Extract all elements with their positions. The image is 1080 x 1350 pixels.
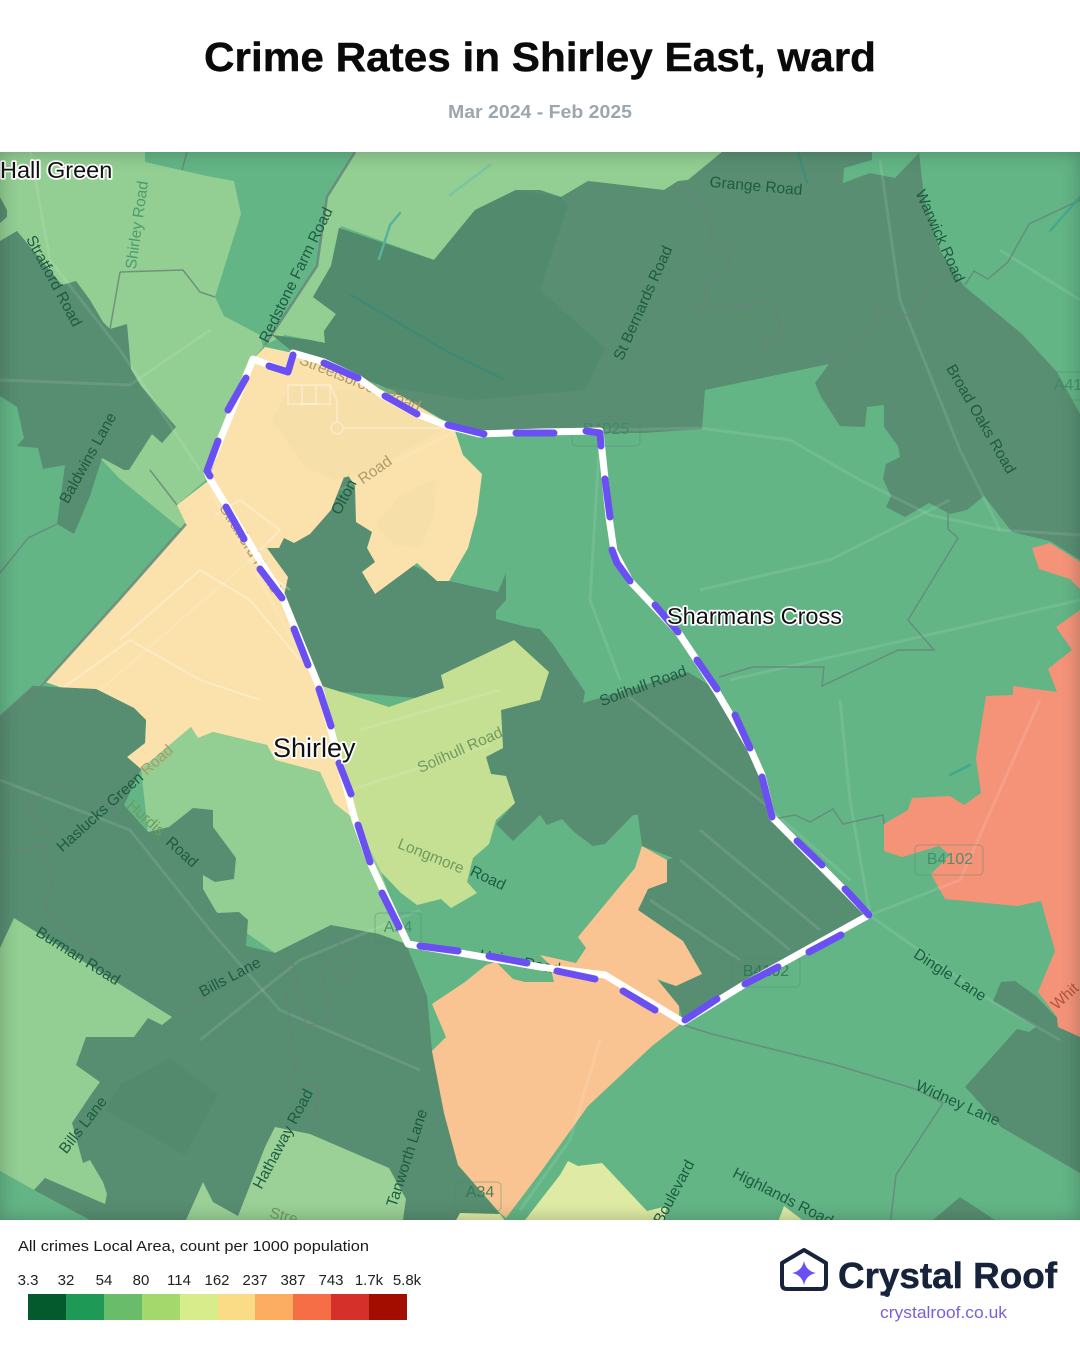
road labels: Broad Oaks Road bbox=[942, 362, 1019, 477]
area: south-west darker block bbox=[105, 1058, 218, 1155]
legend scale values: 387 bbox=[280, 1272, 306, 1289]
road labels: Dingle Lane bbox=[910, 946, 989, 1005]
road labels: Stratford Road bbox=[216, 501, 283, 596]
road labels: Hathaway Road bbox=[250, 1087, 317, 1192]
road labels: Tanworth Lane bbox=[384, 1107, 431, 1209]
subtitle: date range: Mar 2024 - Feb 2025 bbox=[448, 102, 632, 122]
road shields: B4102 bbox=[927, 851, 973, 868]
area: cream park patches bbox=[344, 394, 442, 478]
road labels: Burman Road bbox=[33, 924, 123, 989]
road labels: Bills Lane bbox=[56, 1094, 111, 1157]
road labels: Longmore bbox=[395, 836, 466, 877]
place label: Shirley: Shirley bbox=[273, 733, 356, 763]
road labels: Solihull Road bbox=[415, 724, 505, 777]
legend title: All crimes Local Area, count per 1000 population bbox=[18, 1238, 369, 1255]
road labels: Baldwins Lane bbox=[57, 410, 120, 506]
road labels: Road bbox=[355, 453, 395, 488]
road labels bbox=[22, 174, 1080, 1230]
legend colour bar bbox=[28, 1294, 407, 1320]
road shields: A34 bbox=[466, 1184, 494, 1201]
legend scale values: 54 bbox=[96, 1272, 112, 1289]
legend scale values: 743 bbox=[318, 1272, 344, 1289]
area: south-east dark green bbox=[965, 981, 1080, 1173]
road labels: St Bernards Road bbox=[611, 243, 676, 363]
road labels: Road bbox=[138, 742, 177, 779]
road labels: Shirley Road bbox=[123, 180, 152, 270]
area: north-west light green bbox=[0, 152, 263, 529]
area: Shirley yellow green bbox=[322, 640, 549, 908]
area: north darker block bbox=[272, 190, 516, 386]
road labels: Boulevard bbox=[651, 1157, 698, 1227]
legend scale values: 162 bbox=[204, 1272, 230, 1289]
street network bbox=[0, 150, 1080, 1210]
logo keyhole dot on y bbox=[884, 1291, 890, 1297]
area: north light green bbox=[265, 152, 722, 345]
road labels: Widney Lane bbox=[913, 1077, 1003, 1130]
area: west light green bbox=[0, 918, 172, 1204]
area: south pale yellow bbox=[455, 1161, 805, 1222]
ward boundary: white line with purple dashes bbox=[207, 353, 869, 1022]
title: Crime Rates in Shirley East, ward bbox=[204, 34, 876, 80]
road labels: Stratford Road bbox=[22, 233, 85, 330]
road shields: B4025 bbox=[583, 421, 629, 438]
logo: Crystal Roof bbox=[782, 1250, 1058, 1322]
legend scale values: 32 bbox=[58, 1272, 74, 1289]
road labels: Haslucks Green bbox=[54, 769, 147, 856]
legend scale values: 80 bbox=[133, 1272, 149, 1289]
road labels: Streetsbrook Road bbox=[297, 351, 423, 416]
legend scale values: 1.7k bbox=[355, 1272, 384, 1289]
cream area street details bbox=[60, 385, 455, 700]
area: north-west dark green bbox=[0, 231, 176, 534]
road labels: Grange Road bbox=[709, 174, 803, 199]
road labels: Highlands Road bbox=[730, 1165, 836, 1230]
logo url: crystalroof.co.uk bbox=[880, 1304, 1008, 1322]
road labels: Stre bbox=[268, 1205, 300, 1228]
legend scale values: 3.3 bbox=[18, 1272, 38, 1289]
area: central dark green bbox=[267, 472, 869, 1022]
area: south light green bbox=[186, 1127, 406, 1220]
road labels: Road bbox=[162, 834, 201, 871]
road shields: B4102 bbox=[743, 963, 789, 980]
road labels: Road bbox=[467, 863, 508, 894]
legend bbox=[18, 1238, 422, 1320]
legend scale values: 237 bbox=[242, 1272, 268, 1289]
area: salmon north-east sliver bbox=[1032, 543, 1080, 589]
place label: Sharmans Cross: Sharmans Cross bbox=[667, 603, 842, 629]
road shields bbox=[375, 372, 1080, 1211]
area: north dark green bbox=[272, 152, 1080, 560]
road labels: Redstone Farm Road bbox=[256, 205, 337, 346]
legend scale values bbox=[18, 1272, 422, 1289]
area: south-west dark green bbox=[0, 686, 500, 1220]
area: salmon east bbox=[884, 610, 1080, 1037]
area: peach south bbox=[432, 846, 702, 1218]
logo wordmark: Crystal Roof bbox=[838, 1255, 1058, 1296]
road labels: Hurdis bbox=[123, 797, 168, 840]
road labels: Union Road bbox=[478, 947, 562, 978]
water courses bbox=[351, 152, 1080, 775]
icon: house with star bbox=[782, 1250, 826, 1289]
road shields: A34 bbox=[384, 919, 412, 936]
road labels: Olton bbox=[328, 477, 361, 518]
legend scale values: 114 bbox=[167, 1272, 191, 1289]
road labels: Bills Lane bbox=[197, 954, 264, 1001]
area: south-west centre light green bbox=[141, 727, 406, 953]
boundary lines bbox=[0, 152, 1080, 1226]
road labels: Warwick Road bbox=[912, 187, 968, 285]
place label: Hall Green: Hall Green bbox=[0, 157, 112, 183]
road labels: Solihull Road bbox=[597, 663, 689, 710]
legend scale values: 5.8k bbox=[393, 1272, 422, 1289]
area: Shirley cream bbox=[45, 347, 482, 820]
